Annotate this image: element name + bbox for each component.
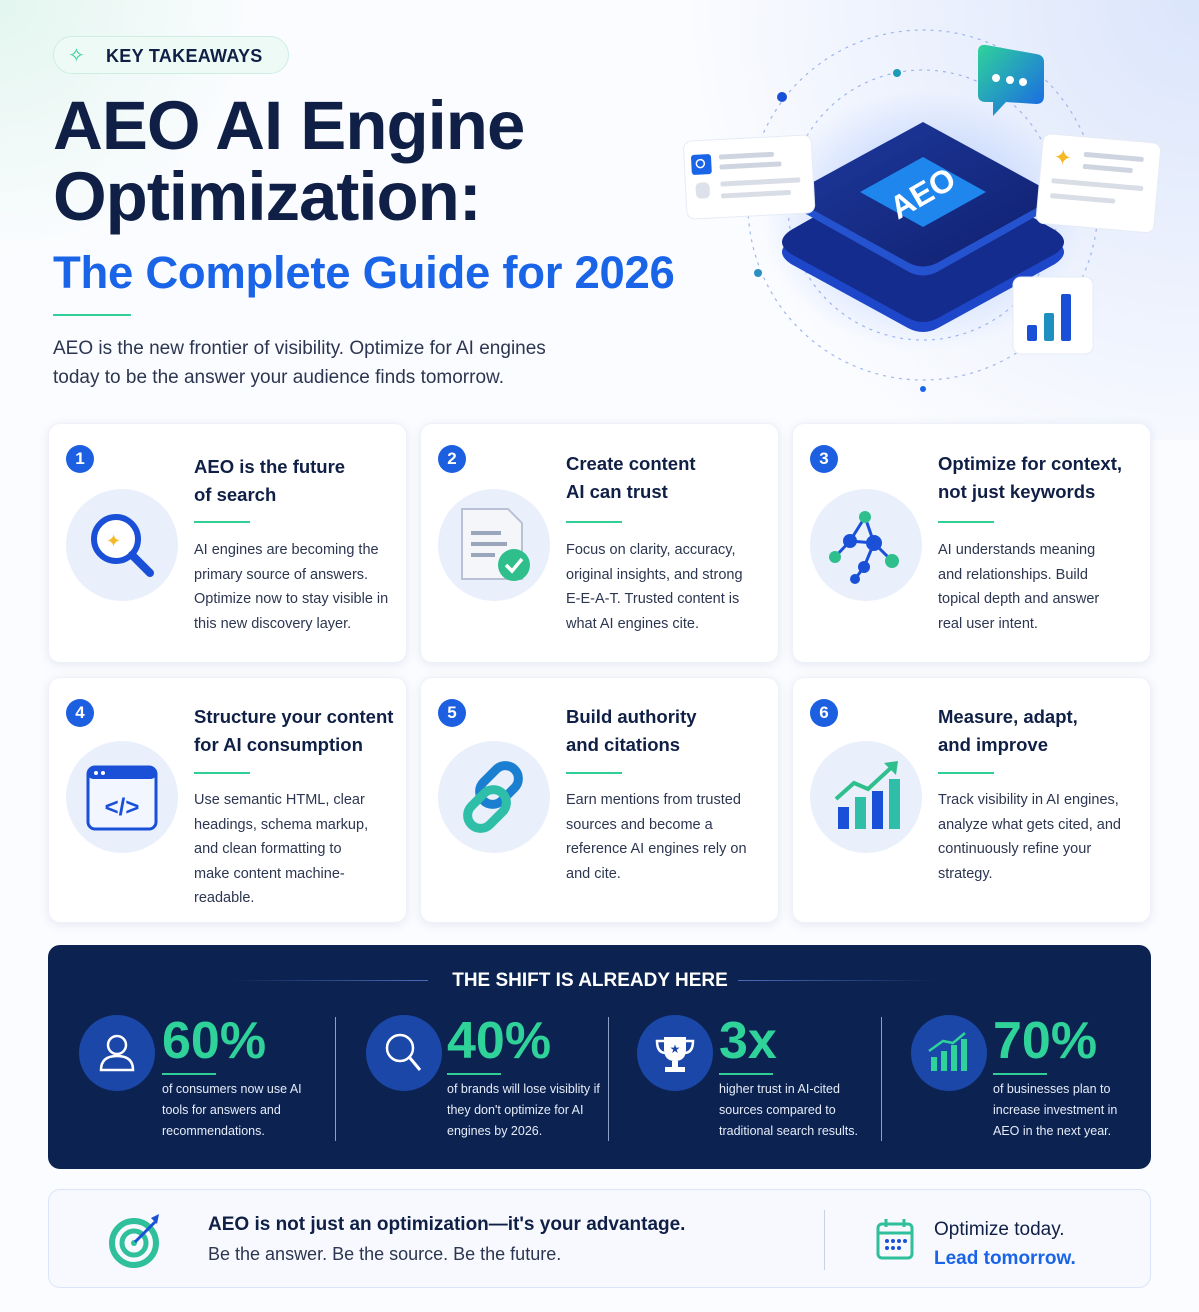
icon: calendar bbox=[876, 1219, 914, 1260]
card 3: not just keywords bbox=[938, 481, 1095, 502]
card 1: AEO is the future bbox=[194, 456, 345, 477]
icon: target bbox=[109, 1214, 159, 1268]
icon: magnifier bbox=[66, 489, 178, 601]
card 5: 5 bbox=[447, 703, 457, 722]
card 6 bbox=[792, 677, 1151, 923]
icon: document check bbox=[438, 489, 550, 601]
card 4 bbox=[48, 677, 407, 923]
cta text: Optimize today. bbox=[934, 1219, 1065, 1240]
card 1: of search bbox=[194, 484, 276, 505]
hero illustration: AEO bbox=[883, 160, 962, 226]
card 5: Build authority bbox=[566, 706, 697, 727]
card 4: Use semantic HTML, clear headings, schema markup, and clean formatting to make content machine-readable. bbox=[194, 792, 368, 906]
title: Optimization: bbox=[53, 158, 481, 235]
card 2: AI can trust bbox=[566, 481, 668, 502]
stat 1 bbox=[79, 1012, 302, 1138]
stat 3 bbox=[637, 1012, 858, 1138]
card 6: Measure, adapt, bbox=[938, 706, 1078, 727]
stat 1: 60% bbox=[162, 1012, 266, 1070]
hero illustration bbox=[683, 29, 1160, 392]
chart card bbox=[1013, 277, 1093, 354]
cta text bbox=[934, 1219, 1076, 1269]
icon: growth chart bbox=[810, 741, 922, 853]
card 3: Optimize for context, bbox=[938, 453, 1122, 474]
card 2: Focus on clarity, accuracy, original insights, and strong E-E-A-T. Trusted content is what AI engines cite. bbox=[566, 542, 743, 632]
stat 4: of businesses plan to increase investment in AEO in the next year. bbox=[993, 1082, 1117, 1138]
stat 2: 40% bbox=[447, 1012, 551, 1070]
card 5: and citations bbox=[566, 734, 680, 755]
card 6: 6 bbox=[819, 703, 829, 722]
badge: key takeaways bbox=[53, 36, 289, 74]
card 3 bbox=[792, 423, 1151, 663]
card 2: 2 bbox=[447, 449, 457, 468]
background glow bbox=[0, 0, 1199, 440]
chat bubble bbox=[978, 45, 1044, 116]
intro text: AEO is the new frontier of visibility. Optimize for AI engines bbox=[53, 338, 546, 359]
stats panel bbox=[48, 945, 1151, 1169]
intro text bbox=[53, 338, 546, 388]
icon: code window: </> bbox=[105, 794, 139, 821]
top layer bbox=[797, 128, 1049, 276]
stat 4: 70% bbox=[993, 1012, 1097, 1070]
panel heading: THE SHIFT IS ALREADY HERE bbox=[452, 970, 728, 991]
stat 4 bbox=[911, 1012, 1117, 1138]
card 3: AI understands meaning and relationships. Build topical depth and answer real user intent. bbox=[938, 542, 1099, 632]
bottom layer bbox=[782, 165, 1064, 332]
card 5: Earn mentions from trusted sources and become a reference AI engines rely on and cite. bbox=[566, 792, 747, 882]
stat 1: of consumers now use AI tools for answers and recommendations. bbox=[162, 1082, 302, 1138]
title bbox=[53, 87, 524, 235]
card 3: 3 bbox=[819, 449, 829, 468]
icon: code window bbox=[66, 741, 178, 853]
footer callout: Be the answer. Be the source. Be the future. bbox=[208, 1244, 561, 1264]
right card: ✦ bbox=[1053, 144, 1073, 171]
card 6: Track visibility in AI engines, analyze what gets cited, and continuously refine your strategy. bbox=[938, 792, 1121, 882]
icon: link bbox=[438, 741, 550, 853]
cta text: Lead tomorrow. bbox=[934, 1248, 1076, 1269]
card 6: and improve bbox=[938, 734, 1048, 755]
card 4: Structure your content bbox=[194, 706, 393, 727]
callout text: AEO is not just an optimization—it's your advantage. bbox=[208, 1214, 685, 1235]
icon: network bbox=[810, 489, 922, 601]
intro text: today to be the answer your audience finds tomorrow. bbox=[53, 367, 504, 388]
card 2 bbox=[420, 423, 779, 663]
stat 3: ★ bbox=[670, 1042, 680, 1056]
icon: magnifier: ✦ bbox=[106, 531, 121, 551]
left card bbox=[683, 135, 815, 219]
title: AEO AI Engine bbox=[53, 87, 524, 164]
icon: sparkle: ✧ bbox=[68, 45, 85, 67]
card 1 bbox=[48, 423, 407, 663]
footer callout bbox=[48, 1189, 1151, 1288]
card 5 bbox=[420, 677, 779, 923]
card 4: 4 bbox=[75, 703, 85, 722]
card 1: AI engines are becoming the primary source of answers. Optimize now to stay visible in this new discovery layer. bbox=[194, 542, 388, 632]
stat 2 bbox=[366, 1012, 600, 1138]
stat 3: higher trust in AI-cited sources compared to traditional search results. bbox=[719, 1082, 858, 1138]
card 1: 1 bbox=[75, 449, 85, 468]
subtitle: The Complete Guide for 2026 bbox=[53, 247, 674, 298]
card 2: Create content bbox=[566, 453, 696, 474]
badge: key takeaways: KEY TAKEAWAYS bbox=[106, 46, 263, 66]
stat 2: of brands will lose visiblity if they don't optimize for AI engines by 2026. bbox=[447, 1082, 600, 1138]
right card bbox=[1036, 133, 1161, 233]
stat 3: 3x bbox=[719, 1012, 777, 1070]
card 4: for AI consumption bbox=[194, 734, 363, 755]
